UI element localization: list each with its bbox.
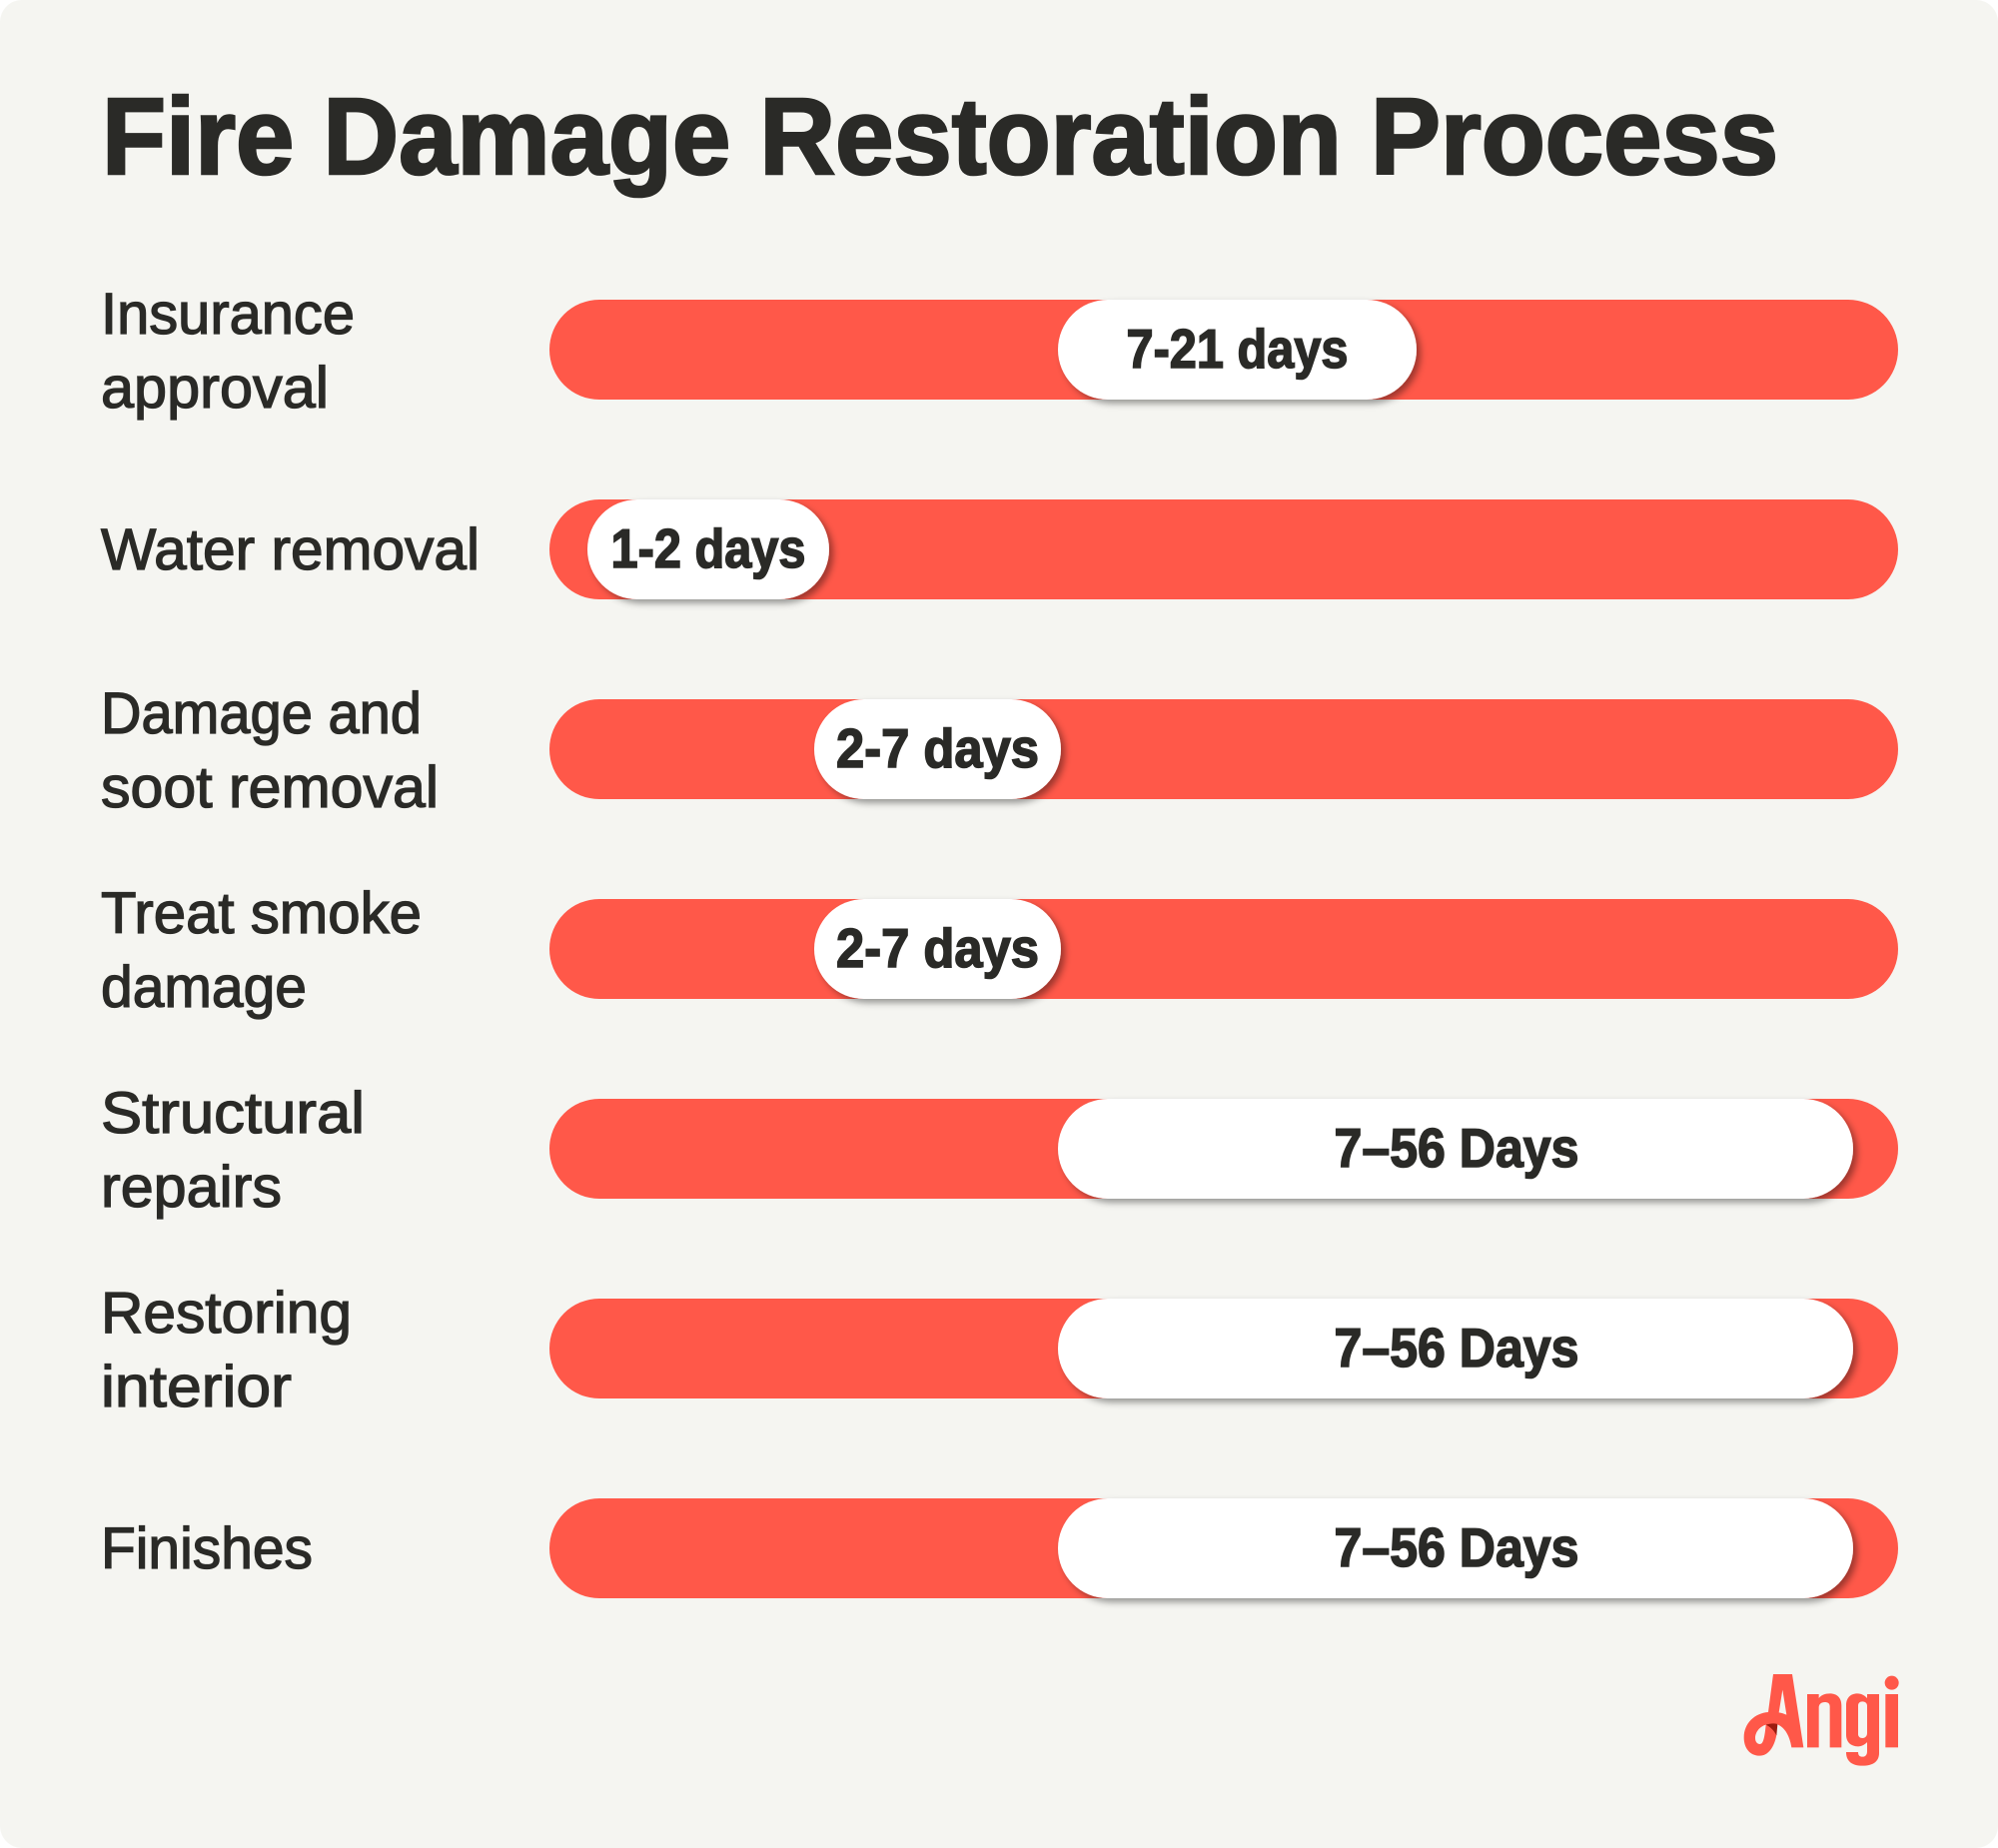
duration text: 2-7 days [836,917,1039,979]
row: water removal [101,499,1898,599]
bar track [549,1498,1898,1598]
bar track [549,300,1898,400]
duration pill: 2-7 days [814,899,1061,999]
bar track [549,899,1898,999]
label: restoring interior: Restoring [101,1281,352,1346]
duration pill: 2-7 days [814,699,1061,799]
label: restoring interior: interior [101,1355,292,1419]
duration text: 2-7 days [836,717,1039,779]
row: insurance approval [101,282,1898,421]
label: finishes: Finishes [101,1516,313,1581]
row: finishes [101,1498,1898,1598]
bar track [549,1099,1898,1199]
bar track [549,499,1898,599]
icon: Angi logo [1744,1674,1899,1766]
row: structural repairs [101,1081,1898,1220]
row: restoring interior [101,1281,1898,1419]
label: insurance approval: Insurance [101,282,355,347]
label: treat smoke damage: damage [101,955,307,1020]
label: insurance approval: approval [101,356,329,421]
label: structural repairs: Structural [101,1081,365,1146]
duration text: 7–56 Days [1335,1317,1578,1379]
label: damage and soot removal: Damage and [101,681,422,746]
label: water removal: Water removal [101,517,480,582]
label: treat smoke damage: Treat smoke [101,881,422,946]
bar track [549,1299,1898,1398]
label: structural repairs: repairs [101,1155,282,1220]
title: Fire Damage Restoration Process [102,76,1778,198]
duration text: 7–56 Days [1335,1117,1578,1179]
duration pill: 7-21 days [1058,300,1417,400]
bar track [549,699,1898,799]
duration text: 7-21 days [1127,318,1349,380]
label: damage and soot removal: soot removal [101,755,439,820]
duration text: 1-2 days [611,517,805,579]
row: damage and soot removal [101,681,1898,820]
row: treat smoke damage [101,881,1898,1020]
duration pill: 7–56 days [1058,1099,1853,1199]
duration pill: 7–56 days [1058,1299,1853,1398]
duration pill: 7–56 days [1058,1498,1853,1598]
duration pill: 1-2 days [587,499,829,599]
duration text: 7–56 Days [1335,1516,1578,1578]
